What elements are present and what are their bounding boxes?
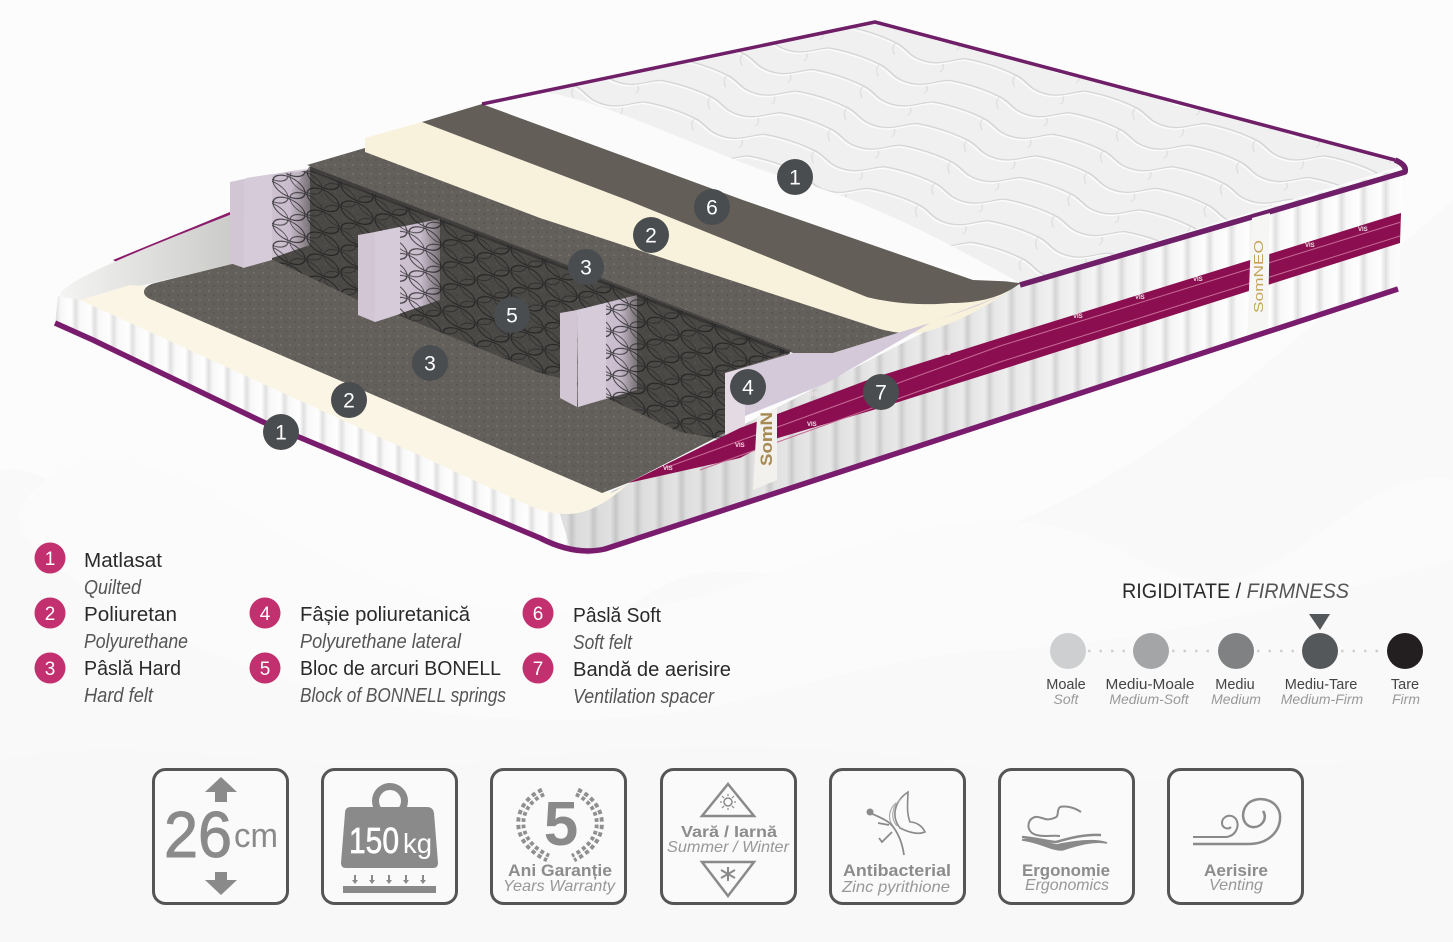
lavender block A face [243,168,310,268]
firmness level firm [1387,633,1423,707]
legend item 6: 6 [533,604,543,625]
marker 2 upper: 2 [645,224,657,248]
legend item 5: Bloc de arcuri BONELL [300,658,501,680]
marker 4 [730,369,766,405]
firmness level firm: Tare [1391,677,1419,693]
purple bottom piping [55,289,1398,551]
marker 2 upper [633,217,669,253]
layer: spring shadow [247,170,790,440]
firmness level medium firm [1281,633,1364,707]
marker 1 lower: 1 [275,422,287,444]
marker 3 lower: 3 [424,352,436,376]
firmness level medium soft: Medium-Soft [1109,691,1190,707]
block of BONNELL springs [270,170,790,440]
marker 1 upper: 1 [789,166,801,190]
legend item 7 [522,652,731,708]
ventilation band VIS marks: VIS [1073,314,1083,320]
icon: 150 kg weight [322,770,456,904]
legend item 5: Block of BONNELL springs [300,685,506,707]
icon: antibacterial butterfly: Zinc pyrithione [841,879,950,896]
icon: summer / winter: Vară / Iarnă [681,824,777,841]
legend item 7: Bandă de aerisire [573,659,731,681]
marker 3 upper: 3 [580,256,592,280]
firmness level medium soft: Mediu-Moale [1106,677,1194,693]
inner wall of the cover [60,214,232,301]
dense spring edge line [310,169,790,353]
marker 7: 7 [875,382,887,404]
firmness level medium [1211,633,1261,707]
firmness level medium soft [1106,633,1194,707]
icon: 26 cm height [154,770,288,904]
label tag right: SomNEO [1251,240,1266,313]
clean block faces [243,174,606,407]
firmness selected pointer [1309,614,1330,630]
firmness level medium: Mediu [1215,677,1255,693]
marker 2 lower [331,382,367,418]
legend item 3: Pâslă Hard [84,658,181,680]
firmness level soft [1046,633,1086,707]
lavender block B face [375,219,440,322]
legend item 2: Polyurethane [84,631,188,653]
ventilation band VIS marks: VIS [941,351,951,357]
firmness title: RIGIDITATE / FIRMNESS [1122,580,1349,603]
layer: upper cream polyurethane [365,122,1018,333]
layer: upper hard felt [307,148,1000,353]
icon: venting swirl: Aerisire [1204,861,1268,880]
ventilation band VIS marks: VIS [807,422,817,428]
marker 7 [863,374,899,410]
icon: venting swirl: Venting [1209,877,1263,894]
ventilation band VIS marks: VIS [1358,227,1368,233]
icon: 150 kg weight: 150 [349,820,399,861]
icon: 5 years warranty: 5 [544,790,578,859]
legend item 4 [250,598,471,653]
ventilation band VIS marks: VIS [735,443,745,449]
icon: summer / winter: Summer / Winter [667,839,790,856]
marker 2 lower: 2 [343,390,355,412]
icon: antibacterial butterfly [830,770,964,904]
legend item 7: Ventilation spacer [573,686,715,708]
mattress cutaway illustration [55,22,1405,556]
legend item 2: Poliuretan [84,604,177,626]
legend item 5 [250,652,506,707]
marker 6 [694,189,730,225]
top purple piping rear [482,22,1395,160]
quilted top cover [482,22,1405,283]
layer: soft felt [422,104,1022,303]
marker 5: 5 [506,304,518,328]
lavender lateral strip 4 [725,296,1000,435]
legend item 3 [34,652,181,707]
label tag right [1247,213,1270,335]
ventilation band 7 [628,213,1401,483]
marker 1 upper [777,159,813,195]
block side faces [230,179,577,407]
legend item 3: 3 [45,659,55,680]
icon: 26 cm height: cm [234,817,278,855]
legend item 1: Matlasat [84,550,162,572]
legend item 2 [34,598,188,653]
firmness level medium firm: Medium-Firm [1281,691,1364,707]
left front spring side [55,296,605,556]
firmness scale [1046,580,1423,707]
ventilation band VIS marks: VIS [1305,243,1315,249]
icon: ergonomics: Ergonomie [1022,861,1110,880]
legend item 6: Pâslă Soft [573,605,661,627]
icon: antibacterial butterfly: Antibacterial [843,861,951,880]
smooth cut flap of the cover [482,92,1020,283]
ventilation band VIS marks [663,227,1368,472]
legend item 4: 4 [260,604,271,625]
legend item 3: Hard felt [84,685,154,707]
legend item 1: Quilted [84,577,142,599]
firmness level soft: Soft [1054,691,1080,707]
legend item 4: Polyurethane lateral [300,631,462,653]
ventilation band VIS marks: VIS [663,466,673,472]
layer: lower cream polyurethane [80,285,628,514]
marker 6: 6 [706,196,718,220]
legend item 6: Soft felt [573,632,633,654]
marker 5 [494,297,530,333]
ventilation band VIS marks: VIS [808,392,818,398]
icon: 5 years warranty: Years Warranty [503,878,616,895]
firmness level soft: Moale [1046,677,1086,693]
label tag left: SomN [757,412,776,466]
layer: lower hard felt [144,166,790,493]
top purple piping front [1020,160,1405,285]
legend item 7: 7 [533,659,543,680]
marker 4: 4 [742,376,754,400]
ventilation band VIS marks: VIS [1193,277,1203,283]
icon: 5 years warranty: Ani Garanție [508,861,612,880]
firmness level medium: Medium [1211,691,1261,707]
marker 3 upper [568,249,604,285]
icon: 150 kg weight: kg [403,828,432,859]
icon: ergonomics: Ergonomics [1025,877,1109,894]
legend item 4: Fâșie poliuretanică [300,604,471,626]
legend item 6 [522,598,661,654]
legend item 1 [34,542,162,599]
icon: 5 years warranty [492,770,626,904]
icon: ergonomics [1000,770,1134,904]
icon: 26 cm height: 26 [164,798,232,871]
legend item 2: 2 [45,604,55,625]
legend item 5: 5 [260,659,270,680]
label tag left [753,408,777,490]
ventilation band VIS marks: VIS [1135,295,1145,301]
firmness dotted connector [1088,650,1386,652]
lavender block C face [577,295,637,407]
icon: venting swirl [1168,770,1302,904]
legend [34,542,731,708]
marker 3 lower [412,345,448,381]
firmness level firm: Firm [1392,691,1420,707]
firmness level medium firm: Mediu-Tare [1285,677,1357,693]
right front spring side [560,167,1405,551]
icon: summer / winter [662,770,796,904]
rear left edge of the cover [113,212,230,264]
marker 1 lower [263,414,299,450]
legend item 1: 1 [45,549,55,570]
